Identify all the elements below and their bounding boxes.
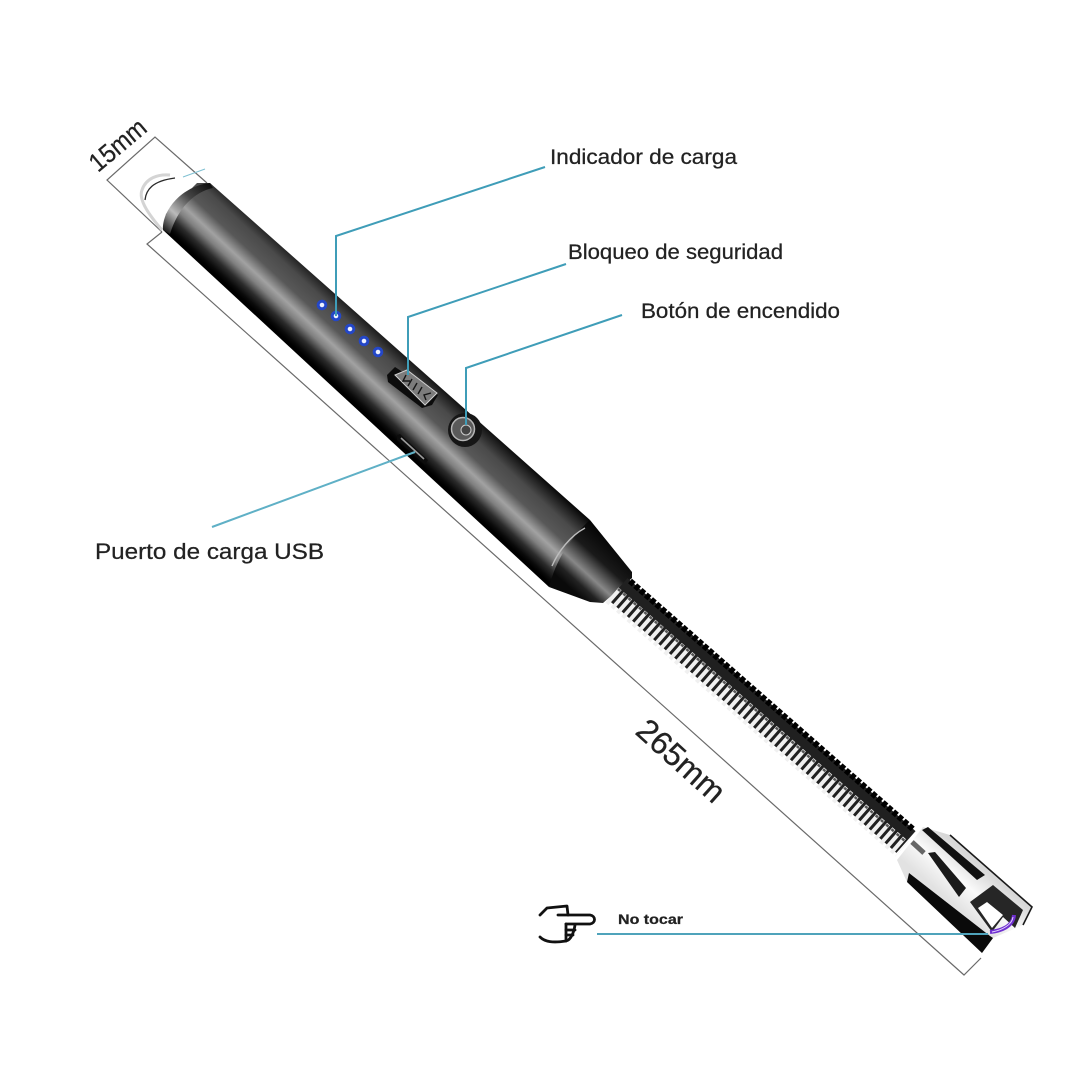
middle slot [928, 852, 966, 897]
leader: Puerto de carga USB [212, 452, 415, 527]
end cap [163, 183, 213, 234]
label: Botón de encendido: Botón de encendido [641, 300, 840, 323]
plasma arc [990, 915, 1014, 932]
cone [549, 520, 632, 603]
label: No tocar: No tocar [618, 911, 684, 927]
electrode opening [970, 885, 1023, 932]
leader: Bloqueo de seguridad [408, 264, 566, 375]
dimension: 265mm: 265mm [629, 711, 733, 810]
charge indicator LEDs [318, 301, 382, 356]
leader: Botón de encendido [466, 315, 622, 425]
dimension: 15mm: 15mm [83, 112, 152, 178]
collar shade [912, 842, 924, 853]
arc head [897, 827, 1032, 953]
label: Indicador de carga: Indicador de carga [550, 146, 737, 169]
icon: pointing hand [540, 906, 594, 942]
leader: No tocar [597, 933, 988, 935]
lighter body [163, 183, 632, 603]
upper slot [922, 827, 985, 880]
lighter ring [141, 169, 205, 230]
head shell [897, 827, 1032, 953]
leader: Indicador de carga [336, 167, 545, 316]
dimension: 15mm [83, 112, 207, 232]
USB port [397, 434, 428, 465]
power button [448, 413, 482, 447]
body tube [163, 183, 590, 587]
label: Puerto de carga USB: Puerto de carga USB [95, 539, 324, 564]
lower black side [907, 873, 993, 953]
label: Bloqueo de seguridad: Bloqueo de seguridad [568, 241, 783, 264]
cone highlight [552, 528, 585, 566]
flexible spring neck [612, 581, 914, 849]
safety lock slider [387, 367, 438, 408]
